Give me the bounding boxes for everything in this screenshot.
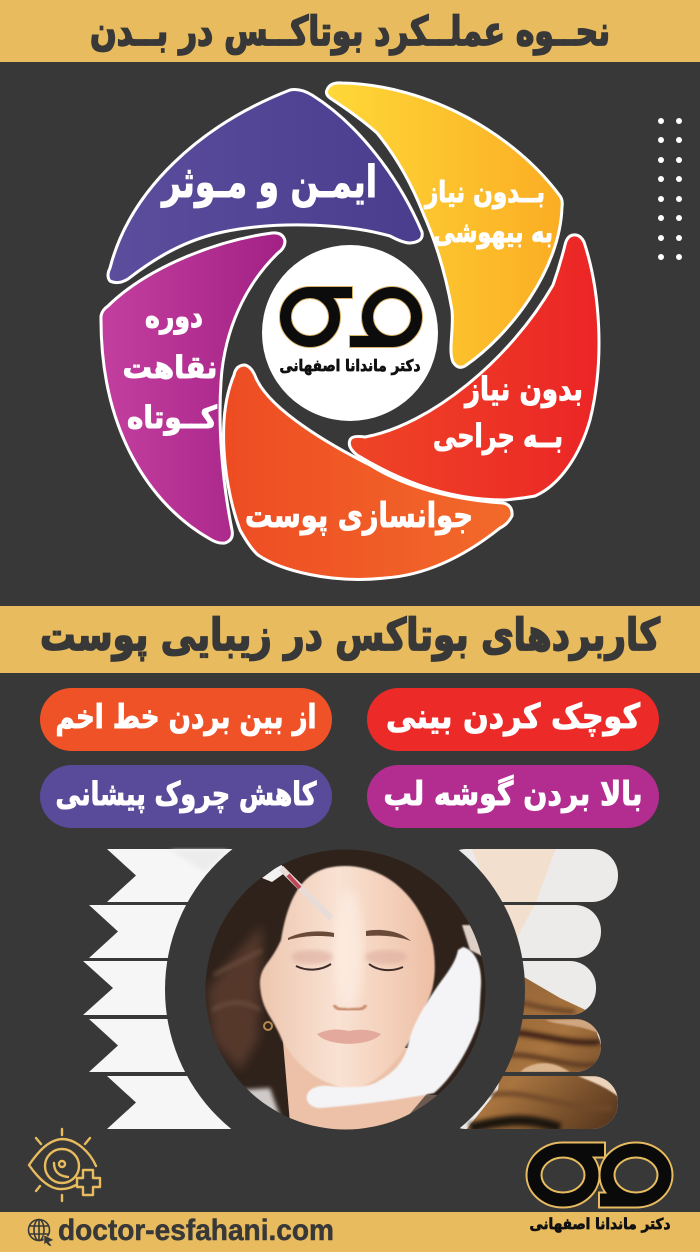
hair background [205, 845, 490, 1135]
petal: no anesthesia: به بیهوشی [433, 215, 553, 249]
dark ring around photo [165, 849, 525, 1129]
petal: no anesthesia: بــدون نیاز [423, 175, 545, 209]
syringe [262, 865, 283, 882]
photo: woman receiving injection [205, 845, 490, 1135]
title banner [0, 0, 700, 62]
closed eyes [296, 964, 403, 970]
dot pattern [658, 118, 682, 260]
center logo [262, 245, 438, 421]
website: doctor-esfahani.com [58, 1214, 334, 1247]
petal: skin rejuvenation [224, 365, 512, 579]
eyebrows [288, 931, 334, 940]
photo strips right [458, 849, 618, 1129]
lower right shadow [385, 1095, 438, 1124]
icon: globe [28, 1220, 54, 1246]
eye shadow [291, 950, 333, 964]
petal: safe and effective: ایمـن و مـوثر [161, 157, 377, 208]
petal: no anesthesia [326, 83, 562, 367]
nose [334, 1005, 366, 1010]
pill: forehead wrinkles [40, 765, 332, 828]
nose highlight [335, 890, 363, 1010]
petal: no surgery: بــه جراحی [433, 417, 563, 455]
petal: short recovery: نقاهت [122, 350, 218, 386]
petal diagram [101, 83, 599, 579]
petal: short recovery: دوره [145, 299, 203, 335]
petal: no surgery [349, 235, 599, 500]
footer bar [0, 1212, 700, 1252]
pill: nose [367, 688, 659, 751]
photo strips left [83, 849, 300, 1129]
neck [282, 1040, 427, 1130]
section banner [0, 606, 700, 673]
pill: deep line [40, 688, 332, 751]
glove [307, 947, 481, 1108]
petal: short recovery [101, 233, 285, 543]
petal: skin rejuvenation: جوانسازی پوست [245, 496, 473, 536]
petal: short recovery: کــوتاه [127, 400, 218, 436]
earring [264, 1022, 272, 1030]
pill: lip corner: بالا بردن گوشه لب [384, 774, 642, 814]
petal: no surgery: بدون نیاز [463, 370, 583, 408]
pill: nose: کوچک کردن بینی [386, 697, 640, 737]
lips [317, 1029, 381, 1044]
pill: deep line: از بین بردن خط اخم [56, 697, 316, 737]
pill: forehead wrinkles: کاهش چروک پیشانی [56, 775, 317, 813]
face [260, 866, 435, 1089]
footer logo [534, 1150, 665, 1200]
center logo: دکتر ماندانا اصفهانی [280, 356, 420, 375]
pill: lip corner [367, 765, 659, 828]
footer logo caption: دکتر ماندانا اصفهانی [530, 1215, 671, 1233]
icon: eye with plus [29, 1129, 100, 1201]
petal: safe and effective [108, 90, 422, 283]
